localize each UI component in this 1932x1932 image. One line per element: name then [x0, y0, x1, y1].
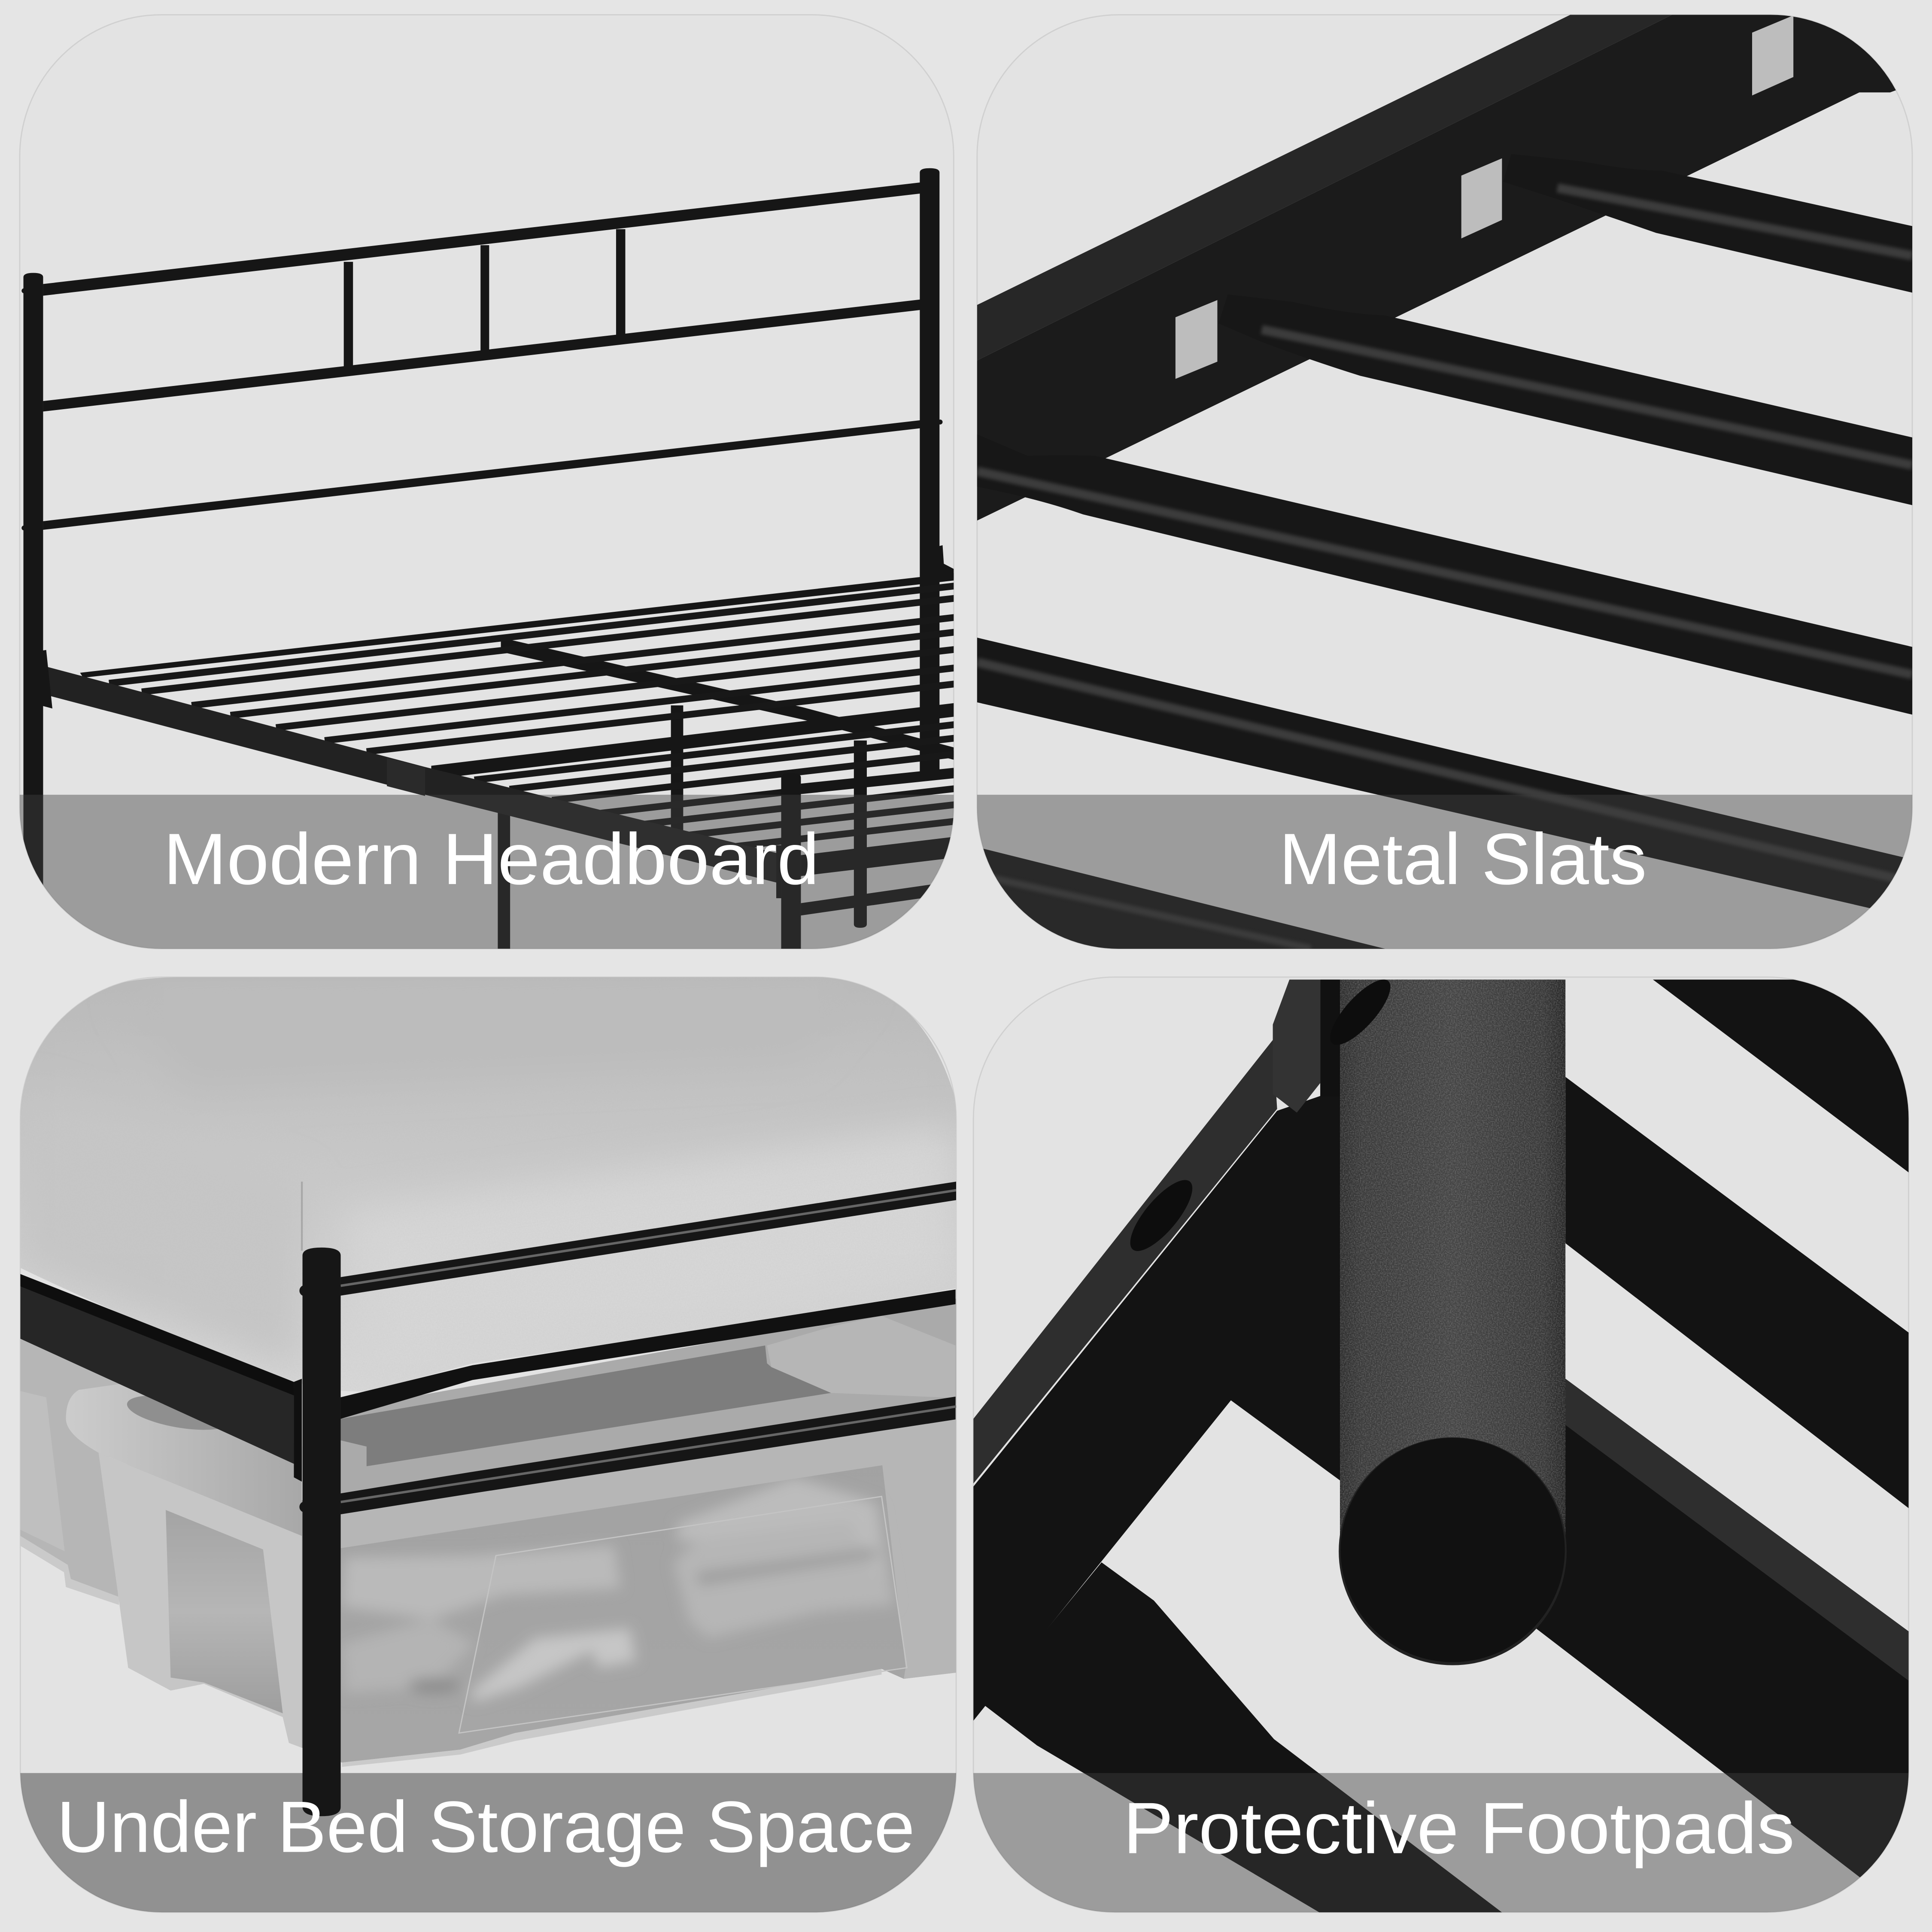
extension crossbar: [431, 703, 956, 779]
slat 5: [977, 847, 1397, 952]
lower left rail: [984, 1562, 1505, 1915]
mattress: [20, 977, 956, 1396]
leg post: [1340, 980, 1565, 1552]
slat 4: [977, 638, 1912, 918]
left frame rail black face: [973, 1089, 1340, 1721]
slat 3: [977, 434, 1912, 715]
center support rail: [501, 638, 956, 760]
left storage box: [20, 1330, 185, 1605]
mattress corner crease: [301, 1182, 303, 1251]
panel: modern headboard: [20, 15, 956, 949]
box bottom rim: [342, 1669, 881, 1767]
lower foot rail: [341, 1397, 956, 1514]
left end of the box body: [99, 1453, 302, 1748]
side frame rail: [34, 650, 781, 898]
headboard posts: [24, 168, 939, 949]
lid tray: [341, 1346, 831, 1466]
right end of the box body: [881, 1446, 956, 1679]
caption: Protective Footpads: Protective Footpads: [1123, 1787, 1795, 1868]
slat slots: [1176, 15, 1793, 379]
panel 2 background: [977, 15, 1912, 949]
washer on frame rail: [1121, 1171, 1202, 1260]
lid right part: [767, 1316, 956, 1398]
panel 4 background: [973, 977, 1908, 1912]
legs behind the slats: [498, 705, 867, 949]
headboard bracket at right: [930, 545, 956, 579]
storage box lid: [66, 1299, 956, 1548]
post screws: [21, 289, 942, 530]
caption band: [977, 795, 1912, 949]
panel: under bed storage space: [20, 977, 956, 1912]
frame rail side face: [977, 14, 1915, 521]
bed leg illustration: [973, 971, 1908, 1915]
frame rail top face: [977, 14, 1674, 360]
main storage box body: [99, 1422, 956, 1767]
clear window outline: [459, 1496, 907, 1733]
folded towels: [342, 1477, 894, 1702]
upper foot rail: [341, 1182, 956, 1296]
front post: [299, 1248, 341, 1816]
bed and storage illustration: [20, 977, 956, 1767]
bed frame illustration: [21, 168, 956, 949]
metal slats: [109, 586, 956, 847]
lid upper area: [341, 1299, 956, 1502]
panel 3 background: [20, 977, 956, 1912]
mattress grain: [20, 977, 956, 1396]
box recess: [166, 1510, 283, 1713]
slat 2: [1218, 295, 1912, 505]
mattress shading: [20, 984, 956, 1385]
caption band: [20, 795, 954, 949]
panel: metal slats: [977, 14, 1915, 952]
caption: Under Bed Storage Space: Under Bed Storage Space: [57, 1786, 915, 1867]
headboard rails: [43, 182, 921, 530]
head end frame rail: [80, 573, 956, 677]
caption band: [973, 1773, 1908, 1912]
side frame rail: [20, 1274, 302, 1482]
slat 1: [1503, 154, 1912, 293]
left frame rail lit face: [973, 1040, 1277, 1483]
footpad: [1339, 1437, 1567, 1665]
washer on post: [1321, 971, 1399, 1053]
lower right rail: [1536, 1379, 1908, 1915]
panel: protective footpads: [973, 971, 1908, 1915]
lid lip below the rail: [341, 1397, 956, 1548]
middle right rail: [1565, 1077, 1908, 1508]
front post and rails: [781, 768, 956, 949]
under mattress rail: [341, 1289, 956, 1419]
top right rail: [1653, 980, 1908, 1173]
caption: Modern Headboard: Modern Headboard: [163, 818, 819, 899]
bracket: [1273, 980, 1340, 1113]
caption: Metal Slats: Metal Slats: [1279, 818, 1647, 899]
caption band: [20, 1773, 956, 1912]
metal slats illustration: [977, 14, 1915, 952]
panel 1 background: [20, 15, 954, 949]
